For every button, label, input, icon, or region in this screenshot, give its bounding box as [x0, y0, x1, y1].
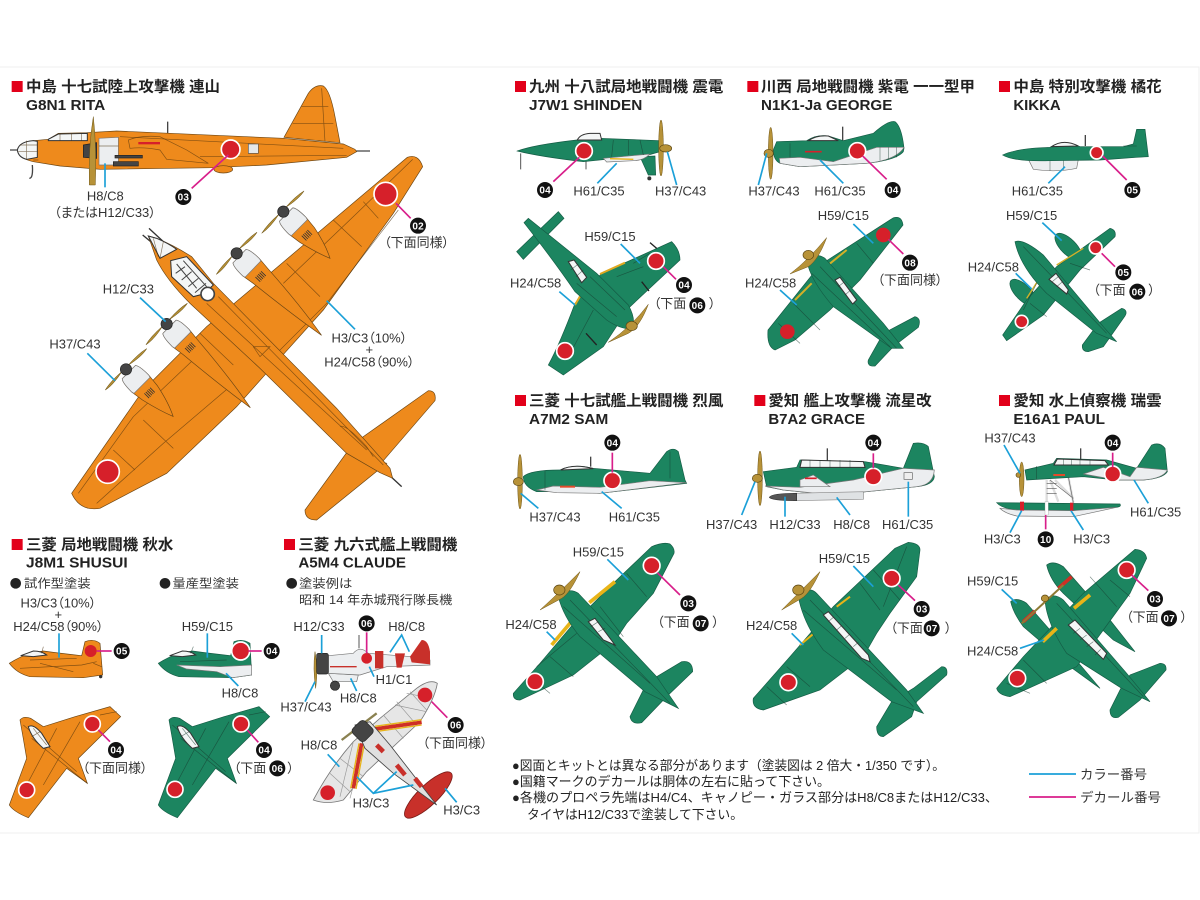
aircraft: George top view — [768, 217, 919, 366]
aircraft: Claude side view — [314, 635, 430, 690]
callout: Kikka H59/C15: H59/C15 — [1006, 208, 1057, 223]
notes text block: ●図面とキットとは異なる部分があります（塗装図は 2 倍大・1/350 です）。 — [512, 758, 945, 773]
callout: Sam H59/C15 — [573, 544, 628, 580]
callout: George H24/C58: H24/C58 — [745, 276, 796, 291]
callout: Grace H59/C15 — [819, 551, 873, 587]
heading: B7A2 Grace — [754, 392, 932, 428]
callout: H8/C8 colour label — [54, 163, 156, 220]
aircraft: Paul top view — [997, 549, 1166, 718]
callout: H12/C33 Claude: H12/C33 — [293, 619, 345, 634]
heading: A5M4 Claude — [284, 535, 458, 572]
callout: H12/C33 Claude — [293, 619, 345, 653]
callout: Kikka H59/C15 — [1006, 208, 1062, 241]
callout: decal 05 — [97, 643, 130, 659]
sub-heading: prototype scheme: 試作型塗装 — [24, 577, 91, 591]
callout: decal 05: 05 — [116, 647, 128, 658]
callout: Paul decal 03 top: （下面 — [1126, 609, 1159, 624]
callout: H3/C3 + H24/C58 mix: H24/C58（90%） — [324, 355, 414, 370]
callout: George decal 04: 04 — [887, 186, 899, 197]
callout: decal 03: 03 — [178, 193, 189, 204]
notes text block: ●国籍マークのデカールは胴体の左右に貼って下さい。 — [512, 774, 830, 789]
callout: H3/C3 tail — [443, 788, 480, 818]
callout: Paul decal 10 — [1038, 515, 1054, 547]
callout: Shinden decal 04 top: 06 — [692, 301, 703, 312]
callout: George H37/C43 — [748, 153, 800, 199]
callout: Shusui orange mix: H24/C58（90%） — [13, 619, 103, 634]
callout: Shinden H37/C43 — [655, 152, 706, 199]
callout: decal 04 side: 04 — [266, 647, 278, 658]
callout: Paul decal 04: 04 — [1107, 438, 1119, 449]
callout: George decal 04 — [863, 156, 901, 198]
callout: H37/C43: H37/C43 — [49, 337, 101, 352]
callout: Sam decal 04 side: 04 — [607, 438, 618, 449]
callout: H8/C8 fuselage — [388, 619, 425, 652]
callout: George H24/C58 — [745, 276, 797, 305]
callout: H12/C33 — [103, 281, 166, 322]
callout: Shusui orange mix: + — [55, 607, 62, 622]
callout: Sam H24/C58: H24/C58 — [505, 617, 557, 632]
aircraft: Shusui prototype side view — [9, 640, 103, 678]
callout: H37/C43 — [49, 337, 115, 381]
sub-heading: production scheme: 量産型塗装 — [172, 577, 239, 591]
callout: Shinden decal 04 top: ） — [709, 296, 716, 311]
callout: Shinden decal 04 side — [537, 157, 579, 198]
callout: Kikka H24/C58: H24/C58 — [968, 259, 1019, 274]
panel: J8M1 Shusui and A5M4 Claude — [9, 535, 487, 824]
callout: George H59/C15: H59/C15 — [818, 208, 869, 223]
callout: George decal 08: （下面同様） — [878, 273, 942, 288]
heading: N1K1-Ja George: 川西 局地戦闘機 紫電 一一型甲 — [761, 78, 975, 96]
callout: H3/C3 tail: H3/C3 — [443, 803, 480, 818]
legend: decal number: デカール番号 — [1080, 790, 1161, 805]
callout: Kikka H61/C35 — [1012, 167, 1065, 199]
aircraft: Grace top view — [753, 542, 947, 737]
callout: Paul H59/C15 — [967, 574, 1018, 603]
callout: Sam H37/C43: H37/C43 — [529, 510, 581, 525]
callout: Grace decal 03 top: 07 — [926, 624, 938, 635]
callout: H3/C3 + H24/C58 mix — [324, 301, 414, 370]
heading: B7A2 Grace: B7A2 GRACE — [768, 412, 865, 428]
callout: H8/C8 colour label: （またはH12/C33） — [54, 205, 156, 220]
aircraft: Sam top view — [513, 543, 693, 723]
sub-heading: Claude scheme note — [286, 577, 452, 607]
heading: J8M1 Shusui — [12, 535, 174, 572]
callout: Sam H37/C43 — [521, 493, 581, 525]
callout: decal 06 top: 06 — [450, 721, 462, 732]
callout: decal 02 — [384, 203, 449, 250]
callout: Shusui orange mix — [13, 596, 103, 658]
callout: Grace H59/C15: H59/C15 — [819, 551, 870, 566]
callout: H3/C3 stripes: H3/C3 — [353, 795, 389, 810]
callout: H8/C8 wheels: H8/C8 — [340, 690, 377, 705]
callout: H59/C15 Shusui — [182, 619, 233, 658]
heading: J8M1 Shusui: 三菱 局地戦闘機 秋水 — [26, 535, 174, 553]
callout: Paul H61/C35: H61/C35 — [1130, 505, 1181, 520]
callout: Kikka H24/C58 — [968, 259, 1032, 289]
callout: Grace decal 04: 04 — [868, 438, 879, 449]
callout: Grace H24/C58 — [746, 618, 803, 645]
heading: N1K1-Ja George — [747, 78, 975, 114]
panel: E16A1 Paul — [967, 392, 1187, 718]
callout: decal 06 top — [423, 702, 487, 751]
callout: Paul decal 04 — [1105, 435, 1121, 467]
callout: Shinden H59/C15 — [584, 229, 640, 263]
aircraft: Grace side view — [752, 443, 934, 506]
callout: Shinden decal 04 side: 04 — [539, 186, 551, 197]
callout: Grace H61/C35 — [882, 482, 933, 532]
callout: decal 06 side — [359, 615, 375, 653]
callout: H8/C8 Shusui — [222, 673, 258, 700]
notes text block — [512, 758, 998, 822]
callout: Shusui orange mix: H3/C3（10%） — [20, 596, 96, 611]
callout: H8/C8 Shusui: H8/C8 — [222, 685, 258, 700]
panel: G8N1 Rita — [10, 78, 449, 520]
callout: Paul decal 03 top: 03 — [1149, 595, 1161, 606]
callout: Shinden H61/C35 — [573, 163, 625, 199]
aircraft: Paul side view — [997, 444, 1167, 517]
callout: Paul H3/C3 right — [1071, 511, 1110, 546]
callout: Kikka decal 05 top: 05 — [1118, 268, 1129, 279]
callout: Grace H8/C8 — [833, 497, 870, 532]
callout: Grace decal 03 top — [890, 585, 952, 636]
callout: Paul H61/C35 — [1130, 480, 1181, 520]
heading: J7W1 Shinden: 九州 十八試局地戦闘機 震電 — [529, 78, 724, 96]
callout: Sam decal 03 top: （下面 — [657, 615, 690, 630]
callout: Grace decal 04 — [865, 435, 881, 468]
legend — [1029, 767, 1161, 805]
callout: Paul H37/C43 — [984, 430, 1036, 473]
aircraft: Claude top view — [313, 682, 458, 824]
callout: Kikka H61/C35: H61/C35 — [1012, 184, 1063, 199]
callout: decal 04 green top: 06 — [272, 764, 283, 775]
callout: Paul H59/C15: H59/C15 — [967, 574, 1018, 589]
callout: H8/C8 wheels — [340, 678, 377, 705]
callout: Shinden H61/C35: H61/C35 — [573, 184, 625, 199]
panel: A7M2 Sam and B7A2 Grace — [505, 392, 952, 737]
heading: G8N1 Rita: G8N1 RITA — [26, 98, 106, 114]
callout: Paul decal 10: 10 — [1040, 535, 1052, 546]
callout: H12/C33: H12/C33 — [103, 281, 154, 296]
aircraft: Shinden side view — [517, 120, 672, 180]
callout: H37/C43 Claude: H37/C43 — [280, 700, 332, 715]
callout: Grace H37/C43 — [706, 482, 757, 532]
callout: Kikka decal 05 side — [1103, 156, 1140, 198]
callout: Grace H24/C58: H24/C58 — [746, 618, 797, 633]
callout: decal 04 green top: （下面 — [234, 760, 266, 775]
callout: H59/C15 Shusui: H59/C15 — [182, 619, 233, 634]
callout: Kikka decal 05 top: ） — [1148, 283, 1155, 298]
sub-heading: Claude scheme note: 昭和 14 年赤城飛行隊長機 — [299, 592, 452, 607]
heading: J8M1 Shusui: J8M1 SHUSUI — [26, 556, 128, 572]
aircraft: Shusui production top view — [158, 707, 270, 818]
callout: H1/C1 — [369, 667, 412, 687]
aircraft: Shusui prototype top view — [9, 707, 121, 818]
callout: Kikka decal 05 top: （下面 — [1093, 283, 1126, 298]
callout: Paul H3/C3 left: H3/C3 — [984, 531, 1021, 546]
callout: Kikka decal 05 side: 05 — [1127, 186, 1138, 197]
aircraft: Sam side view — [513, 449, 687, 509]
callout: Shinden decal 04 top: （下面 — [654, 296, 686, 311]
heading: J7W1 Shinden — [515, 78, 724, 114]
callout: H8/C8 wing: H8/C8 — [301, 738, 337, 753]
aircraft: Kikka top view — [1003, 228, 1126, 352]
callout: Sam decal 03 top — [657, 573, 719, 631]
panel: Kikka — [968, 78, 1162, 352]
aircraft: Rita top view — [72, 156, 435, 520]
callout: George decal 08: 08 — [904, 258, 916, 269]
callout: Paul H24/C58: H24/C58 — [967, 644, 1018, 659]
callout: H3/C3 stripes — [353, 772, 413, 810]
callout: Shinden H24/C58 — [510, 276, 575, 305]
callout: Grace H12/C33 — [769, 497, 821, 532]
callout: decal 02: （下面同様） — [384, 235, 449, 250]
heading: A5M4 Claude: 三菱 九六式艦上戦闘機 — [298, 535, 458, 553]
aircraft: Shusui production side view — [158, 640, 252, 678]
aircraft: Rita side view — [10, 86, 370, 185]
callout: Sam decal 04 side — [604, 435, 620, 473]
callout: Sam decal 03 top: 03 — [683, 599, 694, 610]
notes text block: タイヤはH12/C33で塗装して下さい。 — [527, 807, 743, 822]
callout: Paul H37/C43: H37/C43 — [984, 430, 1036, 445]
notes text block: ●各機のプロペラ先端はH4/C4、キャノピー・ガラス部分はH8/C8またはH12/C33、 — [512, 790, 998, 805]
aircraft: Shinden top view — [517, 212, 680, 375]
heading: G8N1 Rita — [12, 78, 220, 114]
panel: J7W1 Shinden and N1K1-Ja George — [510, 78, 975, 375]
callout: Paul H24/C58 — [967, 640, 1044, 659]
sub-heading: Claude scheme note: 塗装例は — [299, 577, 352, 591]
callout: decal 04 green top: 04 — [258, 746, 270, 757]
callout: Sam H61/C35: H61/C35 — [609, 510, 660, 525]
callout: George decal 08 — [878, 239, 942, 288]
callout: Shinden H37/C43: H37/C43 — [655, 184, 706, 199]
aircraft: Kikka side view — [1003, 129, 1148, 171]
callout: Sam H59/C15: H59/C15 — [573, 544, 624, 559]
callout: H8/C8 colour label: H8/C8 — [87, 189, 124, 204]
heading: A7M2 Sam: A7M2 SAM — [529, 412, 608, 428]
heading: E16A1 Paul: E16A1 PAUL — [1013, 412, 1105, 428]
callout: decal 04 side — [248, 643, 280, 659]
callout: Sam decal 03 top: 07 — [695, 619, 707, 630]
heading: A5M4 Claude: A5M4 CLAUDE — [298, 556, 406, 572]
aircraft: George side view — [764, 121, 904, 179]
heading: A7M2 Sam: 三菱 十七試艦上戦闘機 烈風 — [529, 392, 724, 410]
heading: Kikka: 中島 特別攻撃機 橘花 — [1013, 78, 1162, 96]
callout: George H61/C35: H61/C35 — [814, 184, 866, 199]
heading: Kikka: KIKKA — [1013, 98, 1061, 114]
callout: Shinden H24/C58: H24/C58 — [510, 276, 561, 291]
callout: George H37/C43: H37/C43 — [748, 184, 800, 199]
callout: Grace decal 03 top: （下面 — [890, 620, 923, 635]
callout: H3/C3 + H24/C58 mix: + — [366, 342, 373, 357]
callout: Grace H8/C8: H8/C8 — [833, 517, 870, 532]
callout: decal 04 orange top: （下面同様） — [83, 760, 147, 775]
callout: Shinden H59/C15: H59/C15 — [584, 229, 636, 244]
callout: decal 04 orange top — [83, 730, 147, 775]
callout: Paul decal 03 top: ） — [1180, 609, 1187, 624]
legend: colour number: カラー番号 — [1080, 767, 1147, 782]
heading: A7M2 Sam — [515, 392, 724, 428]
heading: E16A1 Paul — [999, 392, 1162, 428]
callout: Grace H37/C43: H37/C43 — [706, 517, 757, 532]
callout: decal 04 orange top: 04 — [110, 746, 122, 757]
callout: H3/C3 + H24/C58 mix: H3/C3（10%） — [331, 331, 407, 346]
heading: N1K1-Ja George: N1K1-Ja GEORGE — [761, 98, 893, 114]
callout: Paul decal 03 top — [1126, 575, 1187, 626]
callout: H8/C8 fuselage: H8/C8 — [388, 619, 425, 634]
heading: G8N1 Rita: 中島 十七試陸上攻撃機 連山 — [26, 78, 220, 96]
callout: Sam decal 03 top: ） — [712, 615, 719, 630]
callout: H37/C43 Claude — [280, 682, 332, 715]
heading: E16A1 Paul: 愛知 水上偵察機 瑞雲 — [1013, 392, 1162, 410]
callout: decal 06 side: 06 — [361, 619, 373, 630]
callout: Grace decal 03 top: 03 — [916, 605, 928, 616]
callout: decal 06 top: （下面同様） — [423, 736, 487, 751]
callout: Shinden decal 04 top — [654, 267, 716, 313]
callout: Sam H24/C58 — [505, 617, 557, 640]
callout: Kikka decal 05 top: 06 — [1132, 287, 1143, 298]
heading: Kikka — [999, 78, 1162, 114]
callout: George H59/C15 — [818, 208, 873, 243]
heading: J7W1 Shinden: J7W1 SHINDEN — [529, 98, 642, 114]
callout: George H61/C35 — [814, 160, 866, 199]
callout: Sam H61/C35 — [602, 492, 660, 525]
callout: decal 04 green top: ） — [287, 760, 294, 775]
callout: Kikka decal 05 top — [1093, 253, 1155, 300]
callout: decal 03 — [175, 155, 228, 205]
callout: Paul H3/C3 left — [984, 511, 1022, 546]
callout: Grace H12/C33: H12/C33 — [769, 517, 821, 532]
callout: Paul H3/C3 right: H3/C3 — [1073, 531, 1110, 546]
callout: Shinden decal 04 top: 04 — [678, 281, 690, 292]
heading: B7A2 Grace: 愛知 艦上攻撃機 流星改 — [768, 392, 932, 410]
callout: Paul decal 03 top: 07 — [1163, 614, 1175, 625]
callout: Grace H61/C35: H61/C35 — [882, 517, 933, 532]
callout: H1/C1: H1/C1 — [376, 672, 412, 687]
callout: Grace decal 03 top: ） — [945, 620, 952, 635]
callout: decal 02: 02 — [412, 221, 424, 232]
callout: H8/C8 wing — [301, 738, 339, 767]
callout: decal 04 green top — [234, 730, 294, 776]
